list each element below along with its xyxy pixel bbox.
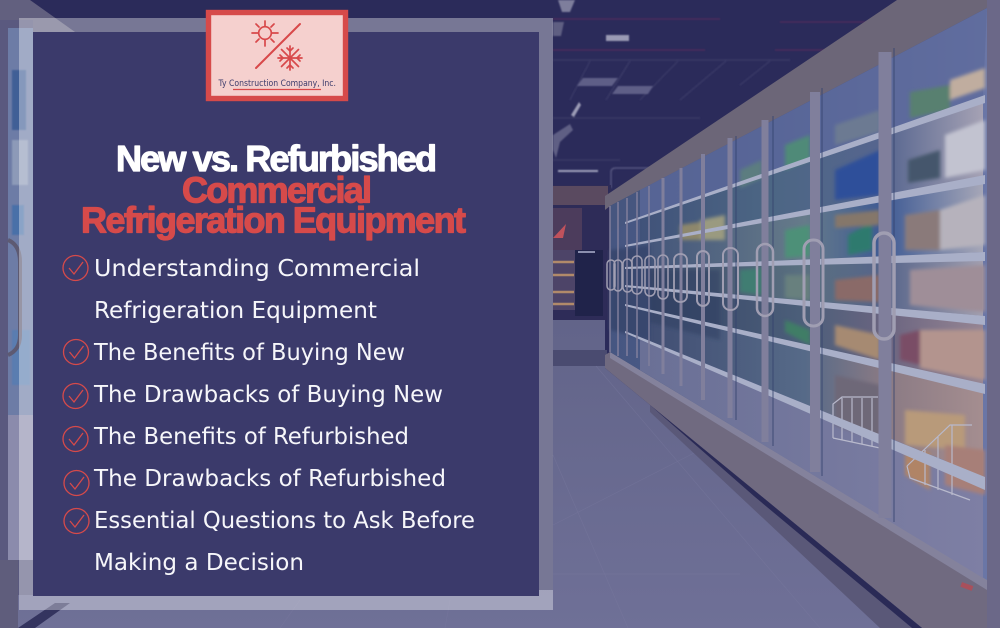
panel: navy content card bbox=[33, 32, 539, 596]
icon: snowflake bbox=[278, 46, 302, 70]
icon: check 2 bbox=[64, 340, 88, 364]
glass bbox=[610, 8, 987, 580]
item 4: The Benefits of Refurbished bbox=[93, 424, 409, 450]
logo underline bbox=[233, 88, 321, 90]
door frames bbox=[610, 48, 894, 522]
logo badge bbox=[208, 12, 346, 98]
item 1 bbox=[94, 256, 420, 324]
item 6 bbox=[94, 508, 475, 576]
icon: check 6 bbox=[64, 508, 89, 534]
right post bbox=[987, 0, 1000, 628]
item 5: The Drawbacks of Refurbished bbox=[93, 466, 446, 492]
icon: slash bbox=[256, 24, 300, 68]
icon: check 3 bbox=[63, 384, 88, 408]
title line: refrigeration equipment: Refrigeration Equipment bbox=[81, 200, 466, 240]
icon: check 5 bbox=[64, 470, 89, 496]
item 2: The Benefits of Buying New bbox=[93, 340, 405, 366]
panel: translucent outer frame bbox=[19, 18, 553, 610]
item 1: Refrigeration Equipment bbox=[94, 298, 377, 324]
icon: check 1 bbox=[63, 256, 88, 280]
item 6: Essential Questions to Ask Before bbox=[94, 508, 475, 534]
door handles bbox=[607, 233, 894, 339]
base bbox=[605, 352, 1000, 628]
item 6: Making a Decision bbox=[94, 550, 304, 576]
product bands bbox=[640, 96, 983, 242]
item 1: Understanding Commercial bbox=[94, 256, 420, 282]
fascia top bbox=[605, 0, 1000, 210]
left door bbox=[0, 0, 75, 628]
ceiling panels and lights bbox=[553, 0, 880, 188]
logo company name: Ty Construction Company, Inc. bbox=[218, 79, 336, 89]
item 3: The Drawbacks of Buying New bbox=[93, 382, 443, 408]
basket wires bbox=[833, 397, 972, 500]
red tag bbox=[960, 582, 973, 591]
icon: check 4 bbox=[63, 426, 88, 452]
floor bbox=[0, 320, 922, 628]
checklist bbox=[63, 256, 475, 576]
product patches bbox=[610, 68, 985, 495]
floor shadow under freezer bbox=[650, 405, 912, 628]
title line: white: New vs. Refurbished bbox=[116, 138, 437, 179]
shelves bbox=[625, 95, 985, 490]
back of store bbox=[553, 185, 611, 320]
icon: sun bbox=[252, 21, 278, 46]
title line: commercial: Commercial bbox=[182, 170, 372, 210]
title bbox=[81, 138, 466, 240]
